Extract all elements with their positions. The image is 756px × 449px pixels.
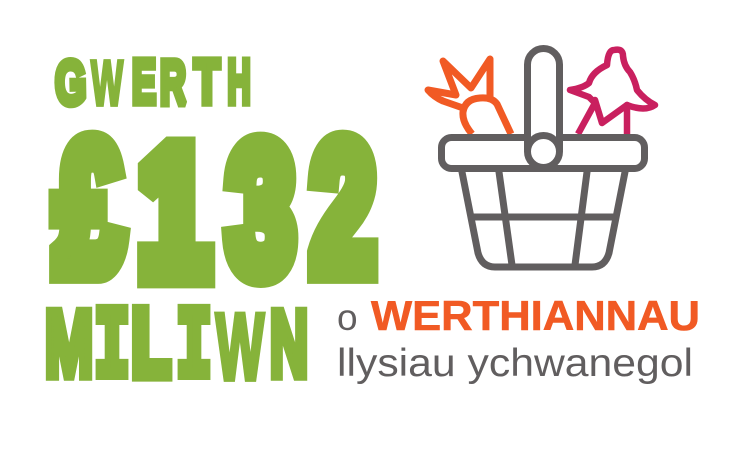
amount: £132: 2 xyxy=(311,104,375,311)
heading: MILIWN: I xyxy=(176,291,212,405)
heading: GWERTH: W xyxy=(91,48,123,119)
amount: £132: 1 xyxy=(139,112,209,312)
caption emphasis: WERTHIANNAU: WERTHIANNAU xyxy=(371,292,700,339)
heading: GWERTH: G xyxy=(54,49,87,119)
basket rim xyxy=(442,138,644,168)
heading: MILIWN: W xyxy=(216,296,264,400)
basket body xyxy=(462,172,625,267)
icon: vegetable basket xyxy=(428,48,655,267)
heading: GWERTH: H xyxy=(227,48,251,117)
icon: carrot xyxy=(428,59,511,134)
heading: MILIWN xyxy=(45,290,308,405)
heading: MILIWN: N xyxy=(270,292,308,397)
amount: £132: £ xyxy=(56,104,122,310)
caption xyxy=(337,292,700,385)
heading: MILIWN: I xyxy=(94,291,130,405)
heading: GWERTH xyxy=(54,47,251,119)
amount: £132: 3 xyxy=(228,106,294,312)
heading: MILIWN: L xyxy=(132,290,170,395)
heading: GWERTH: R xyxy=(160,48,186,117)
heading: GWERTH: T xyxy=(194,48,220,117)
heading: GWERTH: E xyxy=(132,47,156,116)
caption line: llysiau ychwanegol: llysiau ychwanegol xyxy=(337,342,693,385)
caption word: o: o xyxy=(337,297,358,338)
icon: beetroot xyxy=(570,50,655,134)
handle hinge xyxy=(528,136,560,168)
heading: MILIWN: M xyxy=(45,291,93,396)
basket handle xyxy=(528,48,560,150)
amount: £132 xyxy=(56,104,375,312)
